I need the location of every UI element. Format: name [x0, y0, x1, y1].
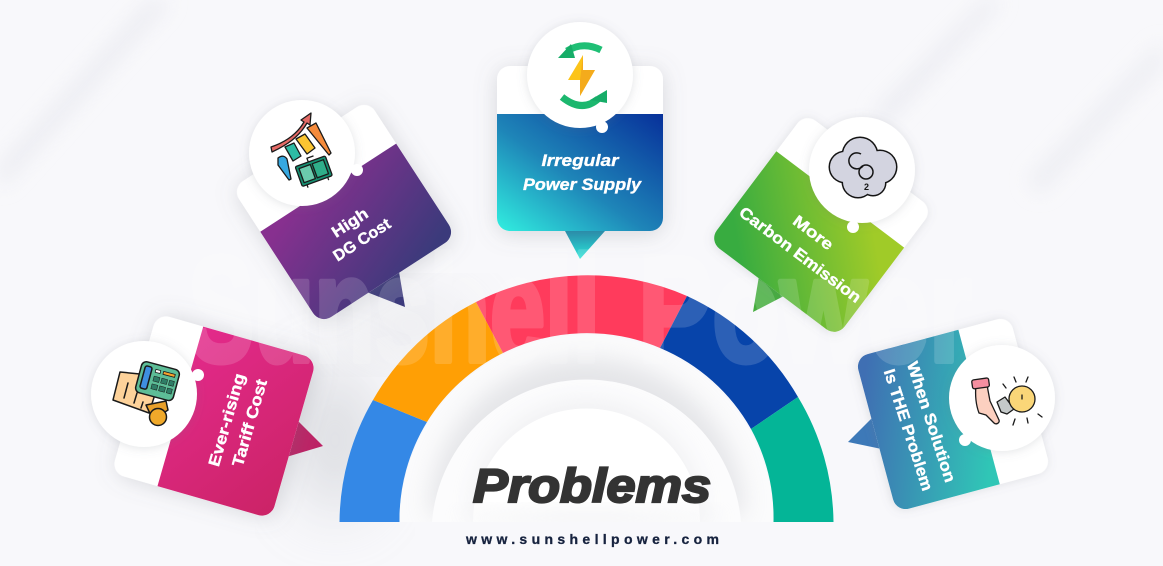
- label: tariff cost: Tariff Cost: [230, 377, 271, 469]
- icon badge: solution: [949, 345, 1055, 451]
- label: more: More: [789, 213, 836, 254]
- icon: CO2 cloud: 2: [864, 182, 869, 192]
- icon badge: CO2: [809, 117, 915, 233]
- inner concentric semicircles: [400, 358, 774, 517]
- label: ever-rising: Ever-rising: [206, 372, 249, 469]
- website url: www.sunshellpower.com: [465, 531, 719, 547]
- arc segment: red: [476, 275, 687, 353]
- icon: chart and generator: [271, 113, 333, 194]
- watermark: sunshell: Sunshell: [188, 225, 600, 393]
- icon badge: tariff: [91, 341, 204, 447]
- icon: hand and lightbulb: [972, 377, 1042, 425]
- arc segment: blue: [340, 400, 427, 522]
- pointer: card 3: [565, 231, 605, 259]
- label: high: High: [329, 205, 372, 241]
- label: carbon emission: Carbon Emission: [735, 204, 864, 307]
- label: is the problem: Is THE Problem: [880, 367, 935, 493]
- icon badge: irregular power: [527, 22, 633, 133]
- icon: lightning and cycle arrows: [558, 44, 607, 106]
- arc segment: teal: [751, 397, 834, 522]
- watermark: [188, 225, 972, 393]
- label: power supply: Power Supply: [523, 175, 643, 194]
- watermark: power: Power: [638, 225, 972, 393]
- panel: more carbon emission: [709, 113, 933, 337]
- pointer: card 5: [848, 402, 906, 454]
- card labels: [206, 151, 958, 493]
- pointer: card 2: [359, 260, 405, 307]
- panel: ever-rising tariff cost: [111, 313, 317, 519]
- arc segment: orange: [373, 302, 503, 422]
- icon badge: DG cost: [249, 100, 363, 206]
- label: when solution: When Solution: [903, 360, 958, 485]
- icon: bill and calculator: [113, 361, 180, 426]
- arc segment: navy: [660, 296, 798, 429]
- pointer: card 1: [263, 408, 323, 464]
- panel: irregular power supply: [497, 66, 663, 231]
- title: Problems: [473, 459, 711, 512]
- label: DG cost: DG Cost: [330, 215, 395, 265]
- pointer: card 4: [753, 252, 807, 312]
- semicircle arc chart: [340, 275, 834, 522]
- label: irregular: Irregular: [542, 151, 620, 170]
- panel: high DG cost: [232, 100, 456, 324]
- panel: when solution is the problem: [855, 316, 1051, 512]
